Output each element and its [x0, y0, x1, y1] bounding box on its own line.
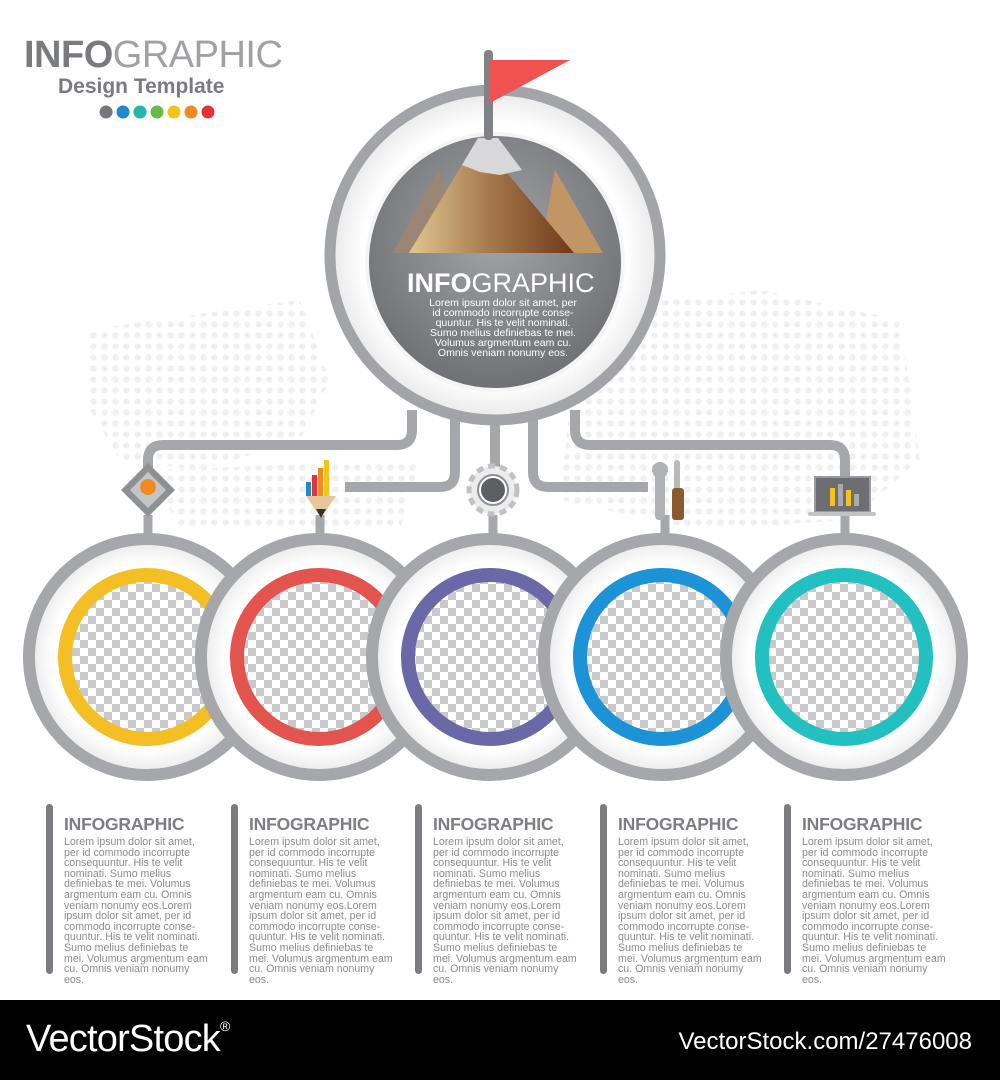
column 2: INFOGRAPHIC	[249, 814, 369, 834]
column 5: mei. Volumus argmentum eam	[802, 953, 946, 965]
column 4: INFOGRAPHIC	[618, 814, 738, 834]
main body text: Sumo melius definiebas te mei.	[430, 327, 576, 339]
column 2: ipsum dolor sit amet, per id	[249, 910, 376, 922]
column 2	[231, 804, 393, 986]
circle 1 yellow	[29, 539, 265, 775]
footer url: VectorStock.com/27476008	[678, 1028, 972, 1055]
icon: mountains with flag	[393, 50, 603, 253]
column 5: cu. Omnis veniam nonumy	[802, 963, 927, 975]
column 4: quuntur. His te velit nominati.	[618, 931, 754, 943]
column 4: nominati. Sumo melius	[618, 868, 725, 880]
column 4	[600, 804, 762, 986]
column 4: argmentum eam cu. Omnis	[618, 889, 746, 901]
icon: pencil chart	[306, 460, 336, 518]
column 5: ipsum dolor sit amet, per id	[802, 910, 929, 922]
text: eos.	[64, 974, 84, 986]
main body text: quuntur. His te velit nominati.	[436, 317, 570, 329]
stems	[148, 515, 845, 538]
column 4: Lorem ipsum dolor sit amet,	[618, 836, 749, 848]
column 3	[415, 804, 577, 986]
column 3: argmentum eam cu. Omnis	[433, 889, 561, 901]
column 2: commodo incorrupte conse-	[249, 921, 380, 933]
column 3: Sumo melius definiebas te	[433, 942, 557, 954]
column 5: INFOGRAPHIC	[802, 814, 922, 834]
footer brand: VectorStock®	[26, 1018, 229, 1060]
column 2: per id commodo incorrupte	[249, 847, 375, 859]
text: eos.	[433, 974, 453, 986]
column 4: cu. Omnis veniam nonumy	[618, 963, 743, 975]
column 2: mei. Volumus argmentum eam	[249, 953, 393, 965]
column 2: veniam nonumy eos.Lorem	[249, 900, 377, 912]
footer band	[0, 1000, 1000, 1080]
main circle	[330, 50, 660, 420]
column 4: definiebas te mei. Volumus	[618, 878, 745, 890]
column 1: argmentum eam cu. Omnis	[64, 889, 192, 901]
column 1: veniam nonumy eos.Lorem	[64, 900, 192, 912]
column 3: mei. Volumus argmentum eam	[433, 953, 577, 965]
column 5: commodo incorrupte conse-	[802, 921, 933, 933]
icon: puzzle	[121, 463, 175, 517]
column 1: INFOGRAPHIC	[64, 814, 184, 834]
text: eos.	[249, 974, 269, 986]
subtitle: Design Template	[58, 75, 224, 98]
column 4: mei. Volumus argmentum eam	[618, 953, 762, 965]
column 3: quuntur. His te velit nominati.	[433, 931, 569, 943]
column 3: per id commodo incorrupte	[433, 847, 559, 859]
column 3: consequuntur. His te velit	[433, 857, 551, 869]
column 5: Sumo melius definiebas te	[802, 942, 926, 954]
text: eos.	[618, 974, 638, 986]
column 3: definiebas te mei. Volumus	[433, 878, 560, 890]
column 1: cu. Omnis veniam nonumy	[64, 963, 189, 975]
circle 3 purple	[372, 539, 608, 775]
column 1: commodo incorrupte conse-	[64, 921, 195, 933]
main body text: id commodo incorrupte conse-	[432, 307, 574, 319]
column 4: commodo incorrupte conse-	[618, 921, 749, 933]
column 5: quuntur. His te velit nominati.	[802, 931, 938, 943]
column 1	[46, 804, 208, 986]
background dotted world map	[85, 290, 920, 530]
column 3: nominati. Sumo melius	[433, 868, 540, 880]
title block	[24, 34, 282, 118]
column 1: nominati. Sumo melius	[64, 868, 171, 880]
column 3: cu. Omnis veniam nonumy	[433, 963, 558, 975]
column 2: quuntur. His te velit nominati.	[249, 931, 385, 943]
column 1: Lorem ipsum dolor sit amet,	[64, 836, 195, 848]
column 1: quuntur. His te velit nominati.	[64, 931, 200, 943]
column 3: Lorem ipsum dolor sit amet,	[433, 836, 564, 848]
column 3: ipsum dolor sit amet, per id	[433, 910, 560, 922]
column 4: Sumo melius definiebas te	[618, 942, 742, 954]
column 3: veniam nonumy eos.Lorem	[433, 900, 561, 912]
title: INFOGRAPHIC: INFOGRAPHIC	[24, 34, 282, 76]
column 5	[784, 804, 946, 986]
column 1: definiebas te mei. Volumus	[64, 878, 191, 890]
column 5: definiebas te mei. Volumus	[802, 878, 929, 890]
column 5: argmentum eam cu. Omnis	[802, 889, 930, 901]
column 5: consequuntur. His te velit	[802, 857, 920, 869]
icon: laptop	[808, 477, 876, 516]
column 4: per id commodo incorrupte	[618, 847, 744, 859]
column 3: commodo incorrupte conse-	[433, 921, 564, 933]
column 2: definiebas te mei. Volumus	[249, 878, 376, 890]
column 1: mei. Volumus argmentum eam	[64, 953, 208, 965]
column 5: per id commodo incorrupte	[802, 847, 928, 859]
column 2: cu. Omnis veniam nonumy	[249, 963, 374, 975]
main heading: INFOGRAPHIC	[407, 268, 595, 298]
circle 4 blue	[544, 539, 780, 775]
column 1: ipsum dolor sit amet, per id	[64, 910, 191, 922]
column 4: ipsum dolor sit amet, per id	[618, 910, 745, 922]
column 1: per id commodo incorrupte	[64, 847, 190, 859]
main body text: Lorem ipsum dolor sit amet, per	[429, 297, 577, 309]
text: eos.	[802, 974, 822, 986]
main body text: Volumus argmentum eam cu.	[435, 337, 571, 349]
column 4: veniam nonumy eos.Lorem	[618, 900, 746, 912]
icon: gear	[469, 466, 517, 514]
column 4: consequuntur. His te velit	[618, 857, 736, 869]
colour dots	[100, 106, 214, 118]
main body text: Omnis veniam nonumy eos.	[438, 347, 568, 359]
column 5: nominati. Sumo melius	[802, 868, 909, 880]
column 3: INFOGRAPHIC	[433, 814, 553, 834]
circle 2 red	[201, 539, 437, 775]
connectors	[148, 410, 845, 487]
column 1: Sumo melius definiebas te	[64, 942, 188, 954]
circle 5 teal	[726, 539, 962, 775]
column 2: consequuntur. His te velit	[249, 857, 367, 869]
column 2: Sumo melius definiebas te	[249, 942, 373, 954]
column 2: argmentum eam cu. Omnis	[249, 889, 377, 901]
column 1: consequuntur. His te velit	[64, 857, 182, 869]
column 2: nominati. Sumo melius	[249, 868, 356, 880]
column 5: Lorem ipsum dolor sit amet,	[802, 836, 933, 848]
icon: tools	[652, 460, 684, 520]
column 5: veniam nonumy eos.Lorem	[802, 900, 930, 912]
column 2: Lorem ipsum dolor sit amet,	[249, 836, 380, 848]
